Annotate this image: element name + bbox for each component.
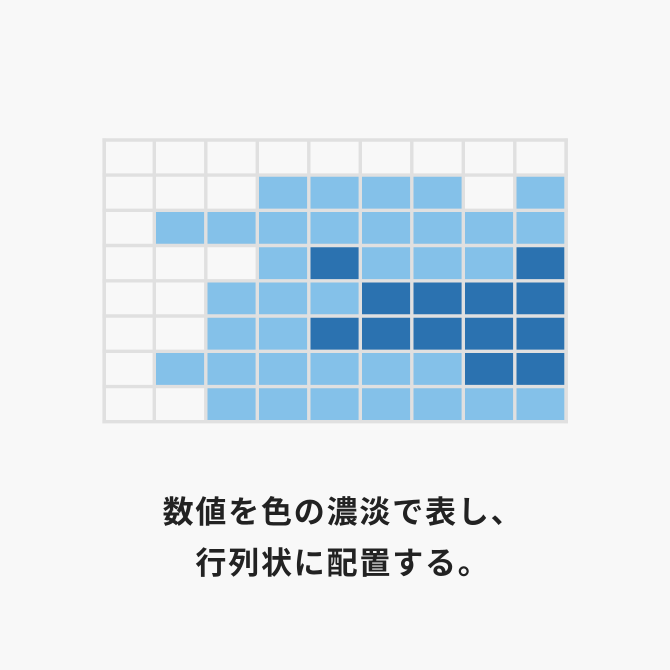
caption line 2: 行列状に配置する。	[195, 546, 491, 581]
caption line 1: 数値を色の濃淡で表し、	[163, 495, 523, 530]
